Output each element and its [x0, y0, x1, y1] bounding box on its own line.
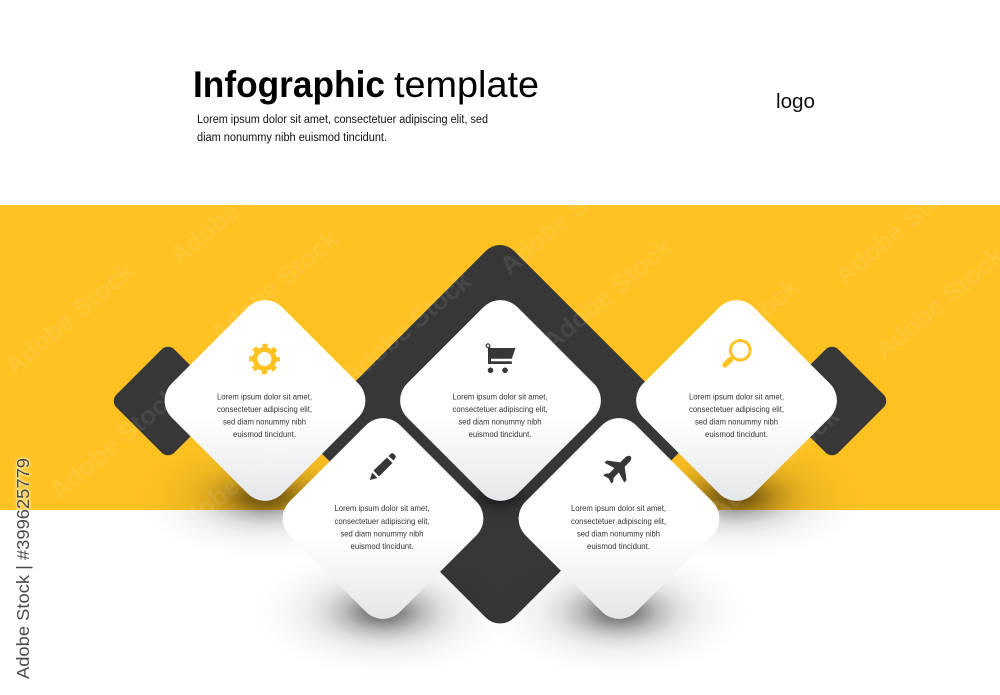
- text: magnifier card: consectetuer adipiscing elit,: [689, 404, 784, 414]
- subtitle text: [197, 114, 488, 144]
- text: magnifier card: sed diam nonummy nibh: [695, 416, 778, 426]
- card: plane: [509, 408, 729, 629]
- card: cart: [390, 290, 611, 511]
- text: gear card: consectetuer adipiscing elit,: [217, 404, 312, 414]
- icon: pencil: [370, 453, 396, 480]
- text: gear card: sed diam nonummy nibh: [223, 416, 306, 426]
- text: plane card: [571, 503, 666, 551]
- text: pencil card: Lorem ipsum dolor sit amet,: [334, 503, 430, 513]
- card: pencil: [273, 408, 493, 629]
- card shadows: [135, 435, 866, 676]
- text: plane card: euismod tincidunt.: [587, 541, 650, 551]
- title: template: [394, 64, 539, 105]
- yellow band: [0, 205, 1000, 510]
- source credit: Adobe Stock | #399625779: [13, 458, 33, 679]
- text: plane card: sed diam nonummy nibh: [577, 528, 660, 538]
- icon: shopping cart: [486, 344, 516, 373]
- watermark: [0, 145, 1000, 546]
- subtitle text: diam nonummy nibh euismod tincidunt.: [197, 132, 387, 144]
- text: cart card: Lorem ipsum dolor sit amet,: [452, 392, 548, 402]
- watermark: Adobe Stock: [704, 400, 845, 526]
- title: Infographic: [193, 64, 385, 105]
- watermark: Adobe Stock: [664, 271, 805, 397]
- text: cart card: sed diam nonummy nibh: [458, 416, 542, 426]
- text: magnifier card: euismod tincidunt.: [705, 429, 768, 439]
- watermark: Adobe Stock: [204, 223, 345, 349]
- icon: airplane: [598, 447, 640, 489]
- text: cart card: [452, 392, 548, 439]
- watermark: Adobe Stock: [494, 155, 635, 281]
- card: gear: [155, 290, 375, 511]
- large dark diamond: [303, 237, 697, 632]
- watermark: Adobe Stock: [164, 420, 305, 546]
- watermark: Adobe Stock: [336, 265, 477, 391]
- text: cart card: consectetuer adipiscing elit,: [452, 404, 548, 414]
- subtitle text: Lorem ipsum dolor sit amet, consectetuer adipiscing elit, sed: [197, 114, 488, 126]
- text: pencil card: sed diam nonummy nibh: [340, 528, 424, 538]
- text: plane card: consectetuer adipiscing elit,: [571, 516, 666, 526]
- source credit: Adobe Stock | #399625779: [13, 458, 33, 679]
- logo: logo: [776, 91, 815, 113]
- text: cart card: euismod tincidunt.: [468, 429, 532, 439]
- icon: magnifier: [725, 340, 750, 365]
- text: magnifier card: [689, 392, 784, 439]
- small dark diamond left: [110, 343, 226, 459]
- text: magnifier card: Lorem ipsum dolor sit amet,: [689, 392, 784, 402]
- watermark: Adobe Stock: [164, 145, 305, 271]
- text: pencil card: consectetuer adipiscing elit,: [334, 516, 430, 526]
- icon: gear: [252, 346, 278, 372]
- card: magnifier: [626, 290, 847, 511]
- small dark diamond right: [774, 343, 890, 459]
- text: pencil card: [334, 503, 430, 551]
- watermark: Adobe Stock: [537, 231, 678, 357]
- watermark: Adobe Stock: [829, 165, 970, 291]
- watermark: Adobe Stock: [44, 380, 185, 506]
- text: gear card: euismod tincidunt.: [233, 429, 296, 439]
- text: pencil card: euismod tincidunt.: [350, 541, 414, 551]
- text: plane card: Lorem ipsum dolor sit amet,: [571, 503, 666, 513]
- text: gear card: [217, 392, 312, 439]
- watermark: Adobe Stock: [0, 255, 140, 381]
- text: gear card: Lorem ipsum dolor sit amet,: [217, 392, 312, 402]
